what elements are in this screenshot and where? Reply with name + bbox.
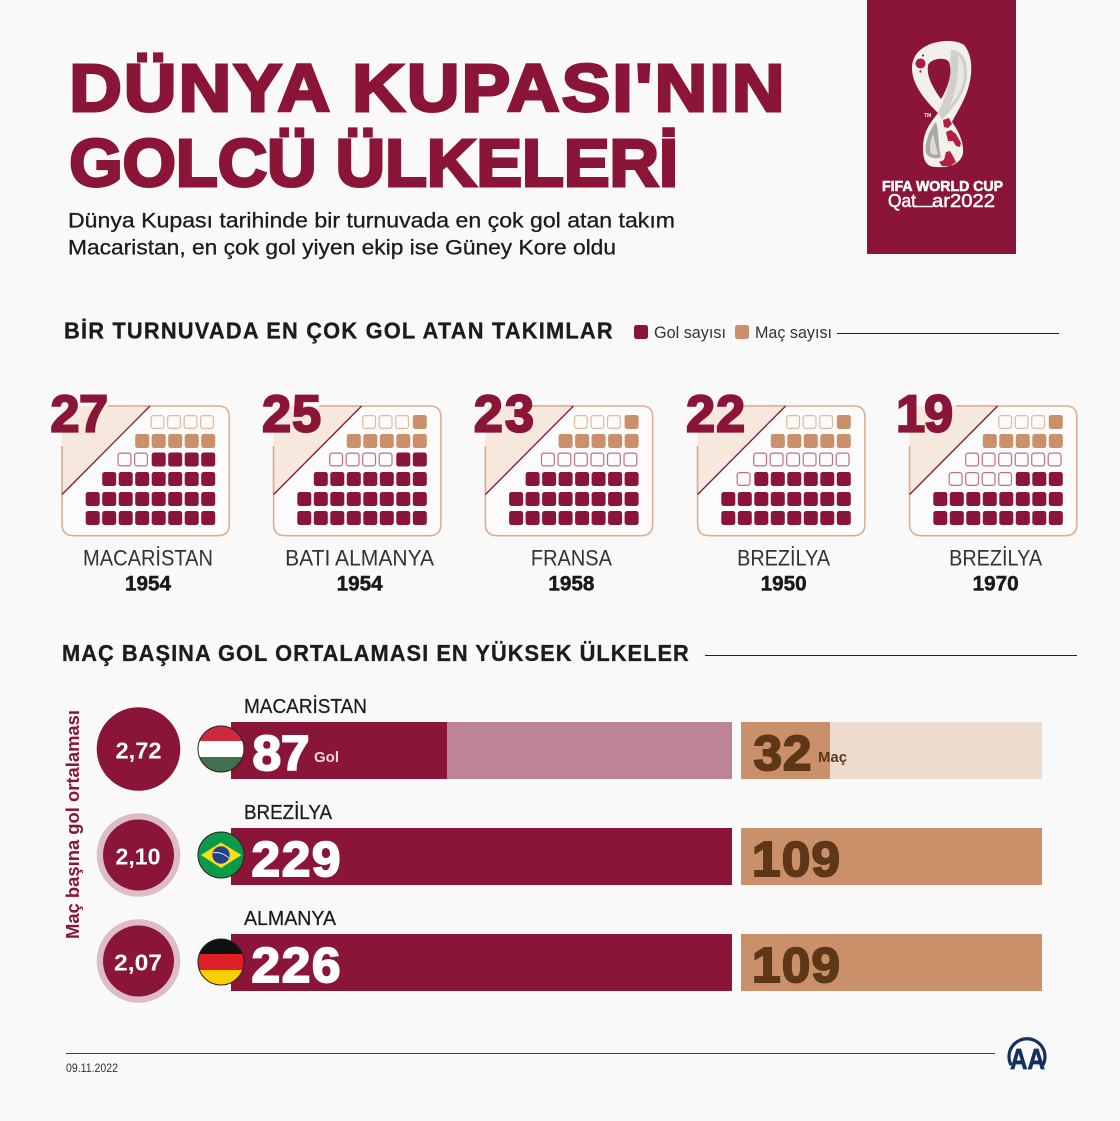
logo text (882, 178, 1003, 211)
panel: Fransa 1958: 1958 (548, 573, 595, 596)
subtitle: Dünya Kupası tarihinde bir turnuvada en çok gol atan takım (68, 209, 675, 233)
row: Macaristan (97, 695, 1042, 791)
logo text: ar2022 (932, 191, 995, 211)
logo panel: FIFA World Cup Qatar 2022 (867, 0, 1016, 254)
country label: BREZİLYA (244, 801, 333, 824)
bar: goals: 87 (253, 726, 310, 781)
bar: goals (231, 828, 732, 887)
average circle (97, 919, 180, 1003)
subtitle (68, 209, 675, 260)
country label: ALMANYA (244, 908, 337, 930)
bar: matches: 109 (752, 938, 840, 993)
panel: Brezilya 1970: BREZİLYA (949, 546, 1042, 570)
average circle: 2,10 (116, 844, 160, 870)
legend (634, 324, 1059, 342)
panel: Macaristan 1954: MACARİSTAN (83, 546, 213, 570)
date: 09.11.2022 (66, 1061, 118, 1075)
bar: goals (231, 934, 732, 993)
panel: Brezilya 1970: 19 (896, 386, 953, 444)
title: DÜNYA KUPASI'NIN (69, 51, 784, 126)
bar: matches: Maç (818, 749, 847, 766)
heading: top scoring teams: BİR TURNUVADA EN ÇOK GOL ATAN TAKIMLAR (64, 317, 613, 344)
footer rule (66, 1052, 995, 1054)
bar: matches: 109 (752, 832, 840, 887)
logo text: Qat (888, 191, 916, 211)
bar: goals: 226 (251, 938, 341, 993)
heading: highest goals per match: MAÇ BAŞINA GOL ORTALAMASI EN YÜKSEK ÜLKELER (62, 639, 689, 666)
panel: Brezilya 1970: 1970 (973, 573, 1019, 596)
bar: goals: Gol (314, 749, 339, 766)
panel: Batı Almanya 1954 (262, 386, 441, 596)
average circle: 2,07 (114, 950, 162, 976)
panel: Brezilya 1950: 22 (686, 386, 745, 444)
icon: AA logo: AA (1010, 1044, 1045, 1076)
panel: Macaristan 1954: 27 (50, 386, 108, 444)
panel: Fransa 1958 (474, 386, 653, 596)
panel: Fransa 1958: 23 (474, 386, 534, 444)
panel: Brezilya 1950 (686, 386, 865, 596)
average circle: 2,72 (116, 738, 162, 764)
panel: Fransa 1958: FRANSA (531, 546, 612, 570)
bar: goals (231, 722, 732, 781)
icon: Brazil flag (198, 832, 244, 878)
panel: Brezilya 1950: 1950 (761, 573, 807, 596)
bar: matches (741, 828, 1042, 887)
axis label: Maç başına gol ortalaması (63, 710, 83, 939)
bar: matches (741, 934, 1042, 993)
legend: Maç sayısı (755, 324, 832, 342)
title (69, 51, 784, 201)
bar: goals: 229 (251, 832, 341, 887)
panel: Batı Almanya 1954: BATI ALMANYA (285, 546, 434, 570)
panel: Macaristan 1954: 1954 (125, 573, 171, 596)
title: GOLCÜ ÜLKELERİ (69, 127, 678, 201)
bar: matches (741, 722, 1042, 781)
logo text: FIFA WORLD CUP (882, 178, 1003, 195)
panel: Brezilya 1950: BREZİLYA (737, 546, 830, 570)
panel: Batı Almanya 1954: 1954 (337, 573, 383, 596)
icon: tournament emblem (912, 41, 971, 167)
row: Brezilya (97, 801, 1042, 897)
icon: Germany flag (197, 938, 245, 986)
row: Almanya (97, 908, 1042, 1003)
icon: tournament emblem: TM (924, 113, 931, 119)
average circle (97, 707, 180, 791)
panel: Brezilya 1970 (896, 386, 1077, 596)
icon: Hungary flag (197, 725, 245, 773)
country label: MACARİSTAN (244, 695, 367, 718)
average circle (97, 813, 180, 897)
bar: matches: 32 (753, 726, 811, 781)
legend: Gol sayısı (654, 324, 726, 342)
panel: Macaristan 1954 (50, 386, 229, 596)
subtitle: Macaristan, en çok gol yiyen ekip ise Güney Kore oldu (68, 236, 616, 260)
panel: Batı Almanya 1954: 25 (262, 386, 321, 444)
